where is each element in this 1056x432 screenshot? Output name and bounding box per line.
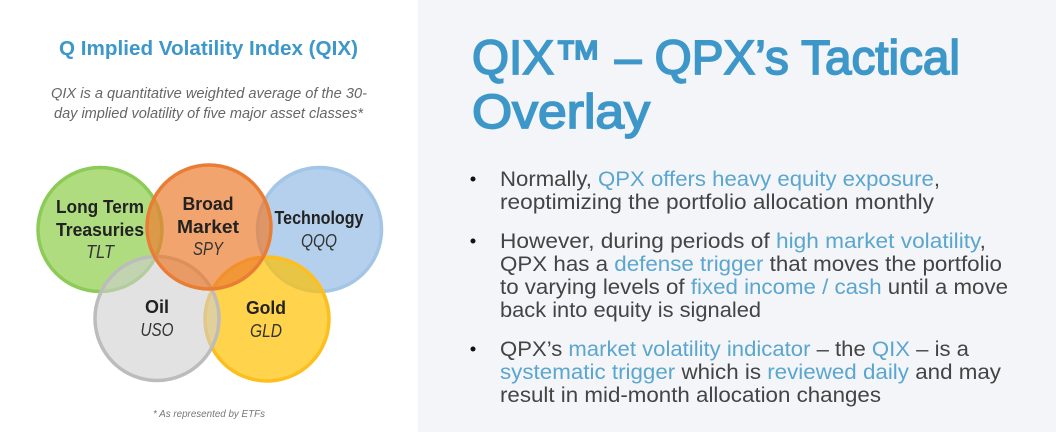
label: technology: Technology [274,208,364,228]
label: broad market [177,194,239,259]
left description: QIX is a quantitative weighted average of the 30- [51,85,367,102]
left description [51,85,367,122]
bullet 1 [470,168,940,214]
right background panel [418,0,1056,432]
bullet 1: reoptimizing the portfolio allocation monthly [500,191,935,214]
footnote: * As represented by ETFs [153,409,265,420]
bullet 2 [470,230,1008,322]
main title: Overlay [472,86,650,139]
bullet 2: back into equity is signaled [500,299,761,322]
label: long term treasuries [56,197,144,262]
bullet 3: result in mid-month allocation changes [500,384,881,407]
label: long term treasuries: Treasuries [56,220,144,240]
bullet 2: QPX has a defense trigger that moves the portfolio [500,253,1002,276]
label: gold [246,298,286,341]
label: oil: USO [140,320,174,340]
label: long term treasuries: TLT [86,242,116,262]
circle: technology [258,168,382,292]
bullet 1: Normally, QPX offers heavy equity exposure , [500,168,940,191]
bullet 3: QPX’s market volatility indicator – the QIX – is a [500,338,969,361]
label: long term treasuries: Long Term [56,197,144,217]
label: gold: GLD [250,321,282,341]
circle: broad market [147,165,271,289]
label: broad market: SPY [193,239,225,259]
label: oil: Oil [145,297,169,317]
main title: QIX™ – QPX’s Tactical [472,32,960,85]
label: gold: Gold [246,298,286,318]
circle: long term treasuries [38,168,162,292]
bullet 2: However, during periods of high market volatility , [500,230,986,253]
label: broad market: Market [177,217,239,237]
circle: gold [205,257,329,381]
label: oil [140,297,174,340]
label: technology: QQQ [301,231,337,251]
venn diagram of asset classes [38,165,382,381]
left heading: Q Implied Volatility Index (QIX) [59,38,358,60]
label: technology [274,208,364,251]
circle: oil [95,256,219,380]
left background panel [0,0,418,432]
main title [472,32,960,139]
bullet 3 [470,338,1002,407]
bullet 2: to varying levels of fixed income / cash until a move [500,276,1008,299]
left description: day implied volatility of five major asset classes* [54,105,364,122]
label: broad market: Broad [182,194,234,214]
bullet 3: systematic trigger which is reviewed daily and may [500,361,1002,384]
